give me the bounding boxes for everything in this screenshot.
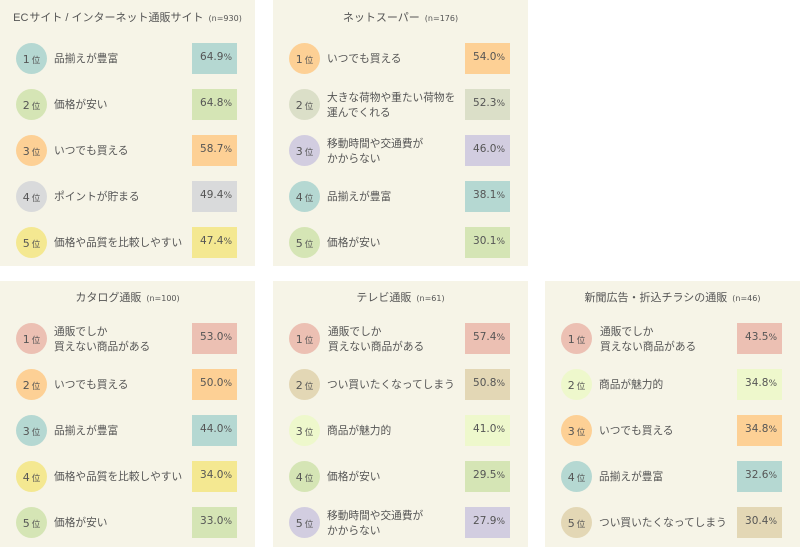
row: rank 5: かからない xyxy=(327,524,380,536)
heading: TV shopping: テレビ通販 (n=61) xyxy=(356,292,445,304)
row: rank 2: 52.3% xyxy=(473,97,505,109)
row: rank 3 xyxy=(16,415,237,446)
row: rank 3: 商品が魅力的 xyxy=(327,425,391,437)
row: rank 1 xyxy=(289,43,510,74)
row: rank 3 xyxy=(289,135,510,166)
row: rank 5 xyxy=(289,507,510,538)
heading: EC site: EC サイト / インターネット通販サイト (n=930) xyxy=(13,12,242,24)
row: rank 3: 3位 xyxy=(568,425,585,438)
row: rank 2: 2位 xyxy=(296,99,313,112)
row: rank 1: 1位 xyxy=(296,53,313,66)
row: rank 2: つい買いたくなってしまう xyxy=(327,379,455,391)
row: rank 3: いつでも買える xyxy=(54,145,128,157)
row: rank 2 xyxy=(16,89,237,120)
row: rank 3: 58.7% xyxy=(200,143,232,155)
row: rank 1: 品揃えが豊富 xyxy=(54,53,118,65)
row: rank 3 xyxy=(289,415,510,446)
row: rank 5: 5位 xyxy=(296,237,313,250)
panel: TV shopping xyxy=(273,281,528,547)
row: rank 2: 2位 xyxy=(23,99,40,112)
row: rank 1: 1位 xyxy=(23,333,40,346)
row: rank 1 xyxy=(289,323,510,354)
row: rank 2 xyxy=(289,369,510,400)
panel: catalog xyxy=(0,281,255,547)
row: rank 2: 大きな荷物や重たい荷物を xyxy=(327,92,455,104)
row: rank 1: 買えない商品がある xyxy=(328,340,424,352)
row: rank 2: 64.8% xyxy=(200,97,232,109)
row: rank 1: いつでも買える xyxy=(327,53,402,65)
row: rank 1: 64.9% xyxy=(200,51,232,63)
row: rank 5: 30.1% xyxy=(473,235,505,247)
row: rank 5: 5位 xyxy=(296,517,313,530)
row: rank 4: 価格が安い xyxy=(327,471,380,483)
row: rank 5 xyxy=(289,227,510,258)
row: rank 4: 4位 xyxy=(23,471,40,484)
row: rank 1: 通販でしか xyxy=(600,326,653,338)
row: rank 5: 価格が安い xyxy=(54,517,107,529)
row: rank 2: 34.8% xyxy=(745,377,777,389)
row: rank 3: 3位 xyxy=(296,425,313,438)
row: rank 3: いつでも買える xyxy=(599,425,674,437)
row: rank 1: 43.5% xyxy=(745,331,777,343)
row: rank 1: 53.0% xyxy=(200,331,232,343)
row: rank 5: 33.0% xyxy=(200,515,232,527)
row: rank 2: 50.8% xyxy=(473,377,505,389)
row: rank 5: 価格や品質を比較しやすい xyxy=(54,237,182,249)
panel: net supermarket xyxy=(273,0,528,266)
row: rank 2: いつでも買える xyxy=(54,379,128,391)
row: rank 4: 4位 xyxy=(568,471,585,484)
row: rank 1: 買えない商品がある xyxy=(600,340,696,352)
row: rank 4: 32.6% xyxy=(745,469,777,481)
row: rank 4: 価格や品質を比較しやすい xyxy=(54,471,182,483)
row: rank 4: 4位 xyxy=(296,471,313,484)
row: rank 3 xyxy=(16,135,237,166)
row: rank 3: かからない xyxy=(327,152,380,164)
row: rank 1 xyxy=(561,323,782,354)
row: rank 4 xyxy=(289,181,510,212)
row: rank 4: 34.0% xyxy=(200,469,232,481)
row: rank 3: 移動時間や交通費が xyxy=(327,138,423,150)
row: rank 5: 価格が安い xyxy=(327,237,380,249)
heading: newspaper ads and flyers: 新聞広告・折込チラシの通販 (n=46) xyxy=(584,292,760,304)
row: rank 3 xyxy=(561,415,782,446)
row: rank 4: 4位 xyxy=(23,191,40,204)
row: rank 2 xyxy=(16,369,237,400)
row: rank 1: 1位 xyxy=(23,53,40,66)
row: rank 4 xyxy=(289,461,510,492)
row: rank 4: 4位 xyxy=(296,191,313,204)
row: rank 1: 54.0% xyxy=(473,51,505,63)
row: rank 5: つい買いたくなってしまう xyxy=(599,517,727,529)
row: rank 4: 38.1% xyxy=(473,189,505,201)
row: rank 2 xyxy=(289,89,510,120)
row: rank 3: 34.8% xyxy=(745,423,777,435)
row: rank 5: 30.4% xyxy=(745,515,777,527)
row: rank 2: 商品が魅力的 xyxy=(599,379,663,391)
row: rank 4: 49.4% xyxy=(200,189,232,201)
row: rank 4 xyxy=(561,461,782,492)
row: rank 5: 移動時間や交通費が xyxy=(327,510,423,522)
row: rank 5 xyxy=(16,507,237,538)
row: rank 3: 44.0% xyxy=(200,423,232,435)
row: rank 3: 41.0% xyxy=(473,423,505,435)
row: rank 4: 29.5% xyxy=(473,469,505,481)
row: rank 1 xyxy=(16,323,237,354)
row: rank 4: ポイントが貯まる xyxy=(54,191,140,203)
row: rank 4 xyxy=(16,181,237,212)
heading: catalog: カタログ通販 (n=100) xyxy=(75,292,180,304)
row: rank 3: 3位 xyxy=(23,145,40,158)
panel: EC site xyxy=(0,0,255,266)
row: rank 1: 1位 xyxy=(296,333,313,346)
panel: newspaper ads and flyers xyxy=(545,281,800,547)
row: rank 1: 57.4% xyxy=(473,331,505,343)
row: rank 2: 価格が安い xyxy=(54,99,107,111)
row: rank 1: 通販でしか xyxy=(54,326,107,338)
row: rank 4 xyxy=(16,461,237,492)
row: rank 3: 3位 xyxy=(296,145,313,158)
row: rank 5 xyxy=(16,227,237,258)
row: rank 2: 運んでくれる xyxy=(327,106,391,118)
row: rank 5: 27.9% xyxy=(473,515,505,527)
row: rank 5 xyxy=(561,507,782,538)
row: rank 1: 通販でしか xyxy=(328,326,381,338)
row: rank 2: 2位 xyxy=(568,379,585,392)
heading: net supermarket: ネットスーパー (n=176) xyxy=(343,12,458,24)
row: rank 4: 品揃えが豊富 xyxy=(599,471,663,483)
row: rank 5: 5位 xyxy=(23,237,40,250)
row: rank 5: 5位 xyxy=(568,517,585,530)
row: rank 1: 買えない商品がある xyxy=(54,340,150,352)
row: rank 4: 品揃えが豊富 xyxy=(327,191,391,203)
row: rank 2 xyxy=(561,369,782,400)
row: rank 5: 5位 xyxy=(23,517,40,530)
row: rank 5: 47.4% xyxy=(200,235,232,247)
row: rank 2: 50.0% xyxy=(200,377,232,389)
row: rank 3: 品揃えが豊富 xyxy=(54,425,118,437)
row: rank 3: 3位 xyxy=(23,425,40,438)
row: rank 1 xyxy=(16,43,237,74)
row: rank 2: 2位 xyxy=(296,379,313,392)
row: rank 1: 1位 xyxy=(568,333,585,346)
row: rank 2: 2位 xyxy=(23,379,40,392)
row: rank 3: 46.0% xyxy=(473,143,505,155)
